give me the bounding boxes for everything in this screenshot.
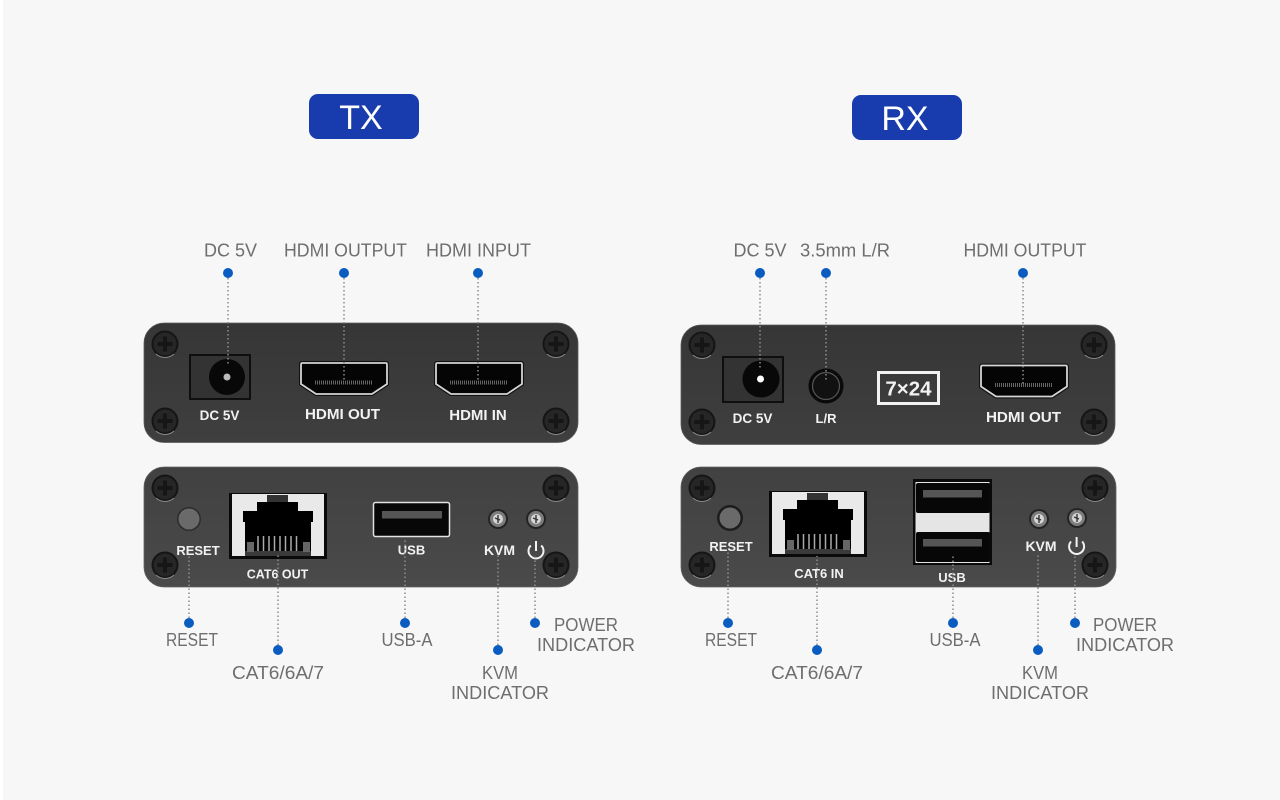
7x24 badge — [878, 372, 938, 404]
TX front port labels: HDMI IN — [449, 407, 507, 424]
button: RX: RX — [881, 100, 929, 138]
TX top callout labels: DC 5V — [204, 240, 257, 260]
TX bottom callout labels: KVM — [482, 663, 518, 683]
RX rear port labels: USB — [938, 570, 966, 585]
RX rear port labels: KVM — [1025, 538, 1057, 554]
TX RJ45 port — [229, 493, 327, 559]
TX rear port labels — [176, 542, 515, 582]
RX front port labels: HDMI OUT — [986, 409, 1062, 426]
RX HDMI output port — [981, 366, 1067, 396]
button: TX: TX — [339, 99, 383, 137]
TX bottom callout labels: USB-A — [382, 630, 432, 650]
RX bottom callout labels: INDICATOR — [1076, 635, 1174, 655]
RX bottom callout labels — [705, 615, 1174, 703]
RX audio jack — [808, 368, 844, 404]
TX bottom callout labels: CAT6/6A/7 — [232, 663, 324, 683]
RX top callout labels: DC 5V — [734, 240, 786, 260]
RX power LED — [1067, 508, 1087, 528]
TX HDMI input port — [436, 363, 522, 394]
RX bottom callout labels: USB-A — [930, 630, 980, 650]
TX rear port labels: USB — [398, 542, 425, 558]
RX rear port labels — [709, 538, 1057, 585]
TX front port labels: DC 5V — [200, 408, 239, 423]
RX top callout labels: 3.5mm L/R — [800, 240, 890, 260]
panel: TX rear — [144, 467, 578, 587]
TX bottom callout labels: INDICATOR — [451, 683, 549, 703]
RX top callout labels: HDMI OUTPUT — [964, 240, 1086, 260]
RX power icon — [1069, 537, 1084, 554]
RX DC jack — [723, 357, 783, 402]
TX top callout labels: HDMI OUTPUT — [284, 240, 407, 260]
RX top callout labels — [734, 240, 1086, 260]
RX bottom callout labels: KVM — [1022, 663, 1058, 683]
RX bottom callout labels: RESET — [705, 630, 757, 650]
RX front port labels: L/R — [816, 411, 837, 426]
TX rear port labels: CAT6 OUT — [247, 568, 309, 582]
TX front port labels: HDMI OUT — [305, 406, 381, 423]
TX top callout labels: HDMI INPUT — [426, 240, 531, 260]
TX front port labels — [200, 406, 507, 424]
RX RJ45 port — [769, 491, 867, 557]
RX rear port labels: CAT6 IN — [794, 566, 844, 581]
TX bottom callout labels: POWER — [554, 615, 618, 635]
TX power LED — [526, 509, 546, 529]
panel: RX front — [681, 325, 1115, 444]
RX bottom callout labels: POWER — [1093, 615, 1157, 635]
TX DC jack — [190, 355, 250, 399]
TX power icon — [528, 541, 544, 558]
TX HDMI output port — [301, 363, 387, 394]
button: RX — [852, 95, 962, 140]
TX connector lines and dots — [184, 268, 540, 655]
TX rear port labels: KVM — [484, 542, 515, 558]
TX bottom callout labels: RESET — [166, 630, 218, 650]
TX top callout labels — [204, 240, 531, 260]
button: TX — [309, 94, 419, 139]
TX rear port labels: RESET — [176, 543, 220, 558]
RX connector lines and dots — [723, 268, 1080, 655]
RX bottom callout labels: INDICATOR — [991, 683, 1089, 703]
RX bottom callout labels: CAT6/6A/7 — [771, 663, 863, 683]
TX reset button — [177, 507, 201, 531]
RX front port labels: DC 5V — [733, 411, 772, 426]
panel: RX rear — [681, 467, 1116, 587]
7x24 badge: 7×24 — [885, 378, 932, 400]
RX dual USB port — [913, 479, 992, 565]
RX reset button — [717, 505, 743, 531]
RX KVM LED — [1029, 509, 1049, 529]
TX bottom callout labels — [166, 615, 635, 703]
TX USB port — [374, 502, 450, 536]
RX front port labels — [733, 409, 1062, 426]
RX rear port labels: RESET — [709, 539, 753, 554]
TX bottom callout labels: INDICATOR — [537, 635, 635, 655]
TX KVM LED — [488, 509, 508, 529]
panel: TX front — [144, 323, 578, 442]
